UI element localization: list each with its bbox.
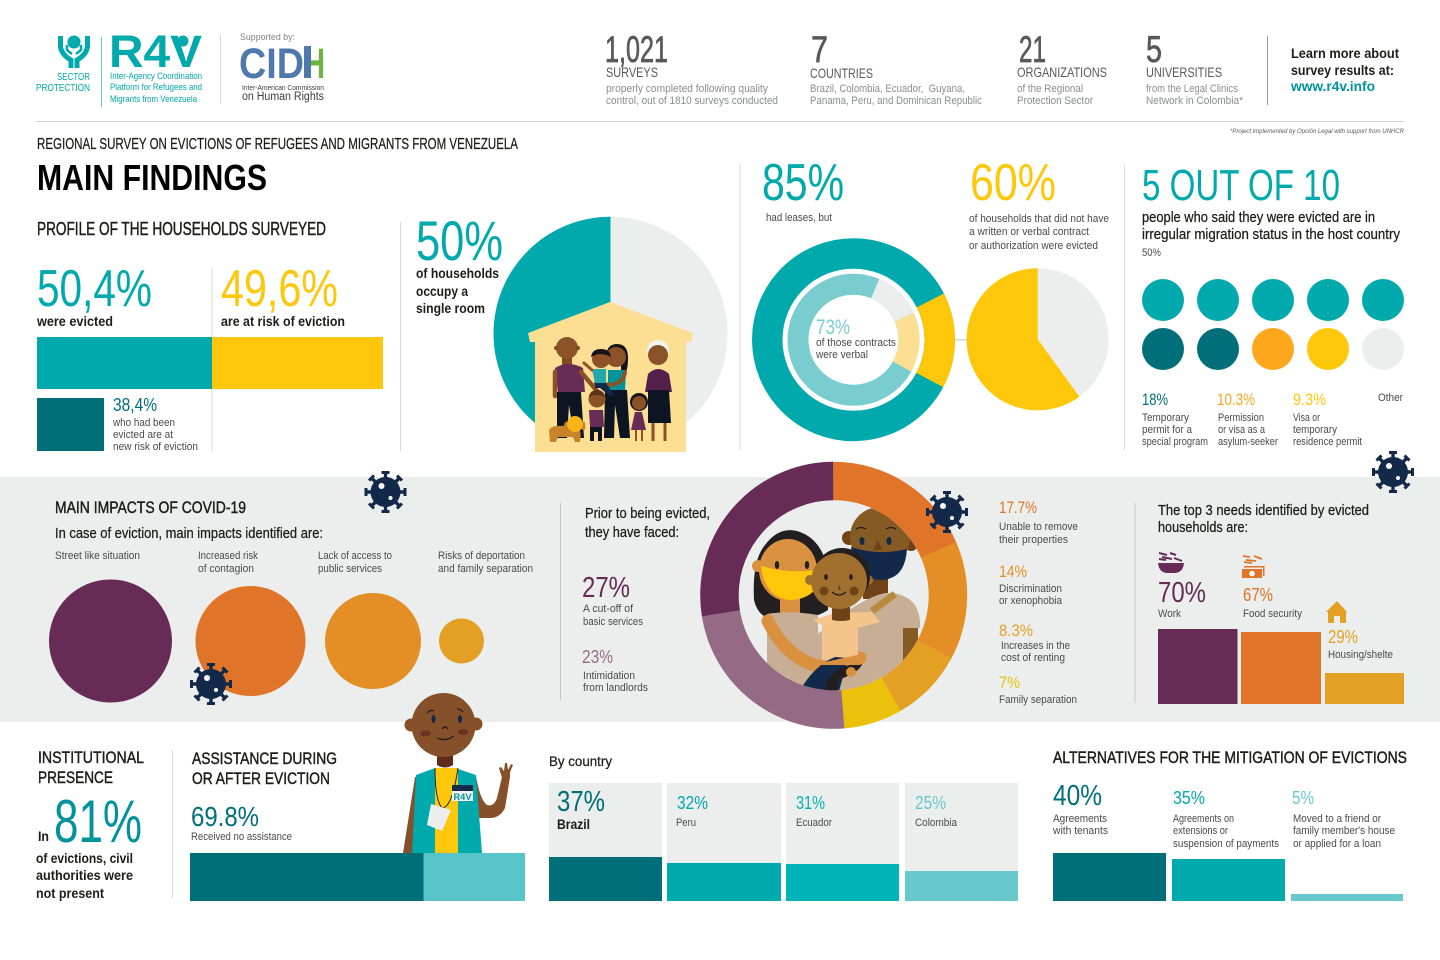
need: work: [1158, 577, 1206, 620]
stat: surveys: [605, 29, 778, 107]
dog: [549, 416, 586, 442]
R4V platform description: Inter-Agency Coordination: [110, 71, 202, 81]
status: visa: residence permit: [1293, 436, 1362, 448]
69.8 percent: [191, 801, 292, 843]
impact: contagion: Increased risk: [198, 550, 258, 562]
heading: households are:: [1158, 519, 1248, 536]
column: Colombia: [905, 783, 1018, 901]
60 percent text: of households that did not have: [969, 213, 1109, 225]
column: Ecuador: 31%: [796, 793, 825, 813]
impact: public services: Lack of access to: [318, 550, 392, 562]
heading: PROFILE OF THE HOUSEHOLDS SURVEYED: [37, 219, 326, 239]
73 percent text: were verbal: [815, 349, 868, 361]
stat: countries: COUNTRIES: [810, 65, 873, 81]
73 percent text: of those contracts: [816, 337, 896, 349]
status: permission: [1217, 390, 1278, 448]
pie chart 60 percent: [967, 268, 1109, 410]
dot matrix: [1142, 279, 1404, 370]
panel: donut legend: [999, 498, 1078, 706]
unable to remove: Unable to remove: [999, 521, 1078, 533]
column: Brazil: [549, 783, 662, 901]
new risk text: evicted are at: [113, 429, 173, 441]
column: Brazil: Brazil: [557, 816, 590, 832]
stat: universities: UNIVERSITIES: [1146, 64, 1222, 80]
icon: virus on donut: [928, 492, 966, 532]
heading: [38, 748, 144, 787]
alternative: extensions: 35%: [1173, 788, 1205, 808]
need: food security: 67%: [1243, 585, 1273, 605]
sector protection label: PROTECTION: [36, 82, 90, 94]
alternative: moved: or applied for a loan: [1293, 838, 1381, 850]
R4V logo: R4V: [109, 26, 202, 77]
alternative: extensions: Agreements on: [1173, 813, 1234, 825]
bar: at risk: [212, 337, 383, 389]
donut chart: [719, 481, 948, 710]
basic services: basic services: [583, 616, 643, 628]
alternative: agreements: Agreements: [1053, 813, 1107, 825]
85 percent text: had leases, but: [766, 212, 832, 224]
single room text: [416, 209, 503, 316]
heading: irregular migration status in the host country: [1142, 226, 1400, 243]
R4V platform description: Migrants from Venezuela: [110, 94, 197, 104]
learn more callout: survey results at:: [1291, 62, 1394, 78]
bar chart: [1158, 629, 1404, 704]
panel: covid impacts: [49, 498, 533, 702]
need: housing: Housing/shelte: [1328, 649, 1393, 661]
heading: 5 OUT OF 10: [1142, 161, 1340, 210]
heading: ASSISTANCE DURING: [192, 749, 337, 768]
CIDH logo: CID: [239, 40, 304, 88]
bar: evicted: [37, 337, 212, 389]
81 percent: In: [38, 828, 49, 844]
stat: countries: [810, 29, 982, 107]
panel: assistance: [190, 749, 525, 901]
need: food security: Food security: [1243, 608, 1302, 620]
69.8 percent: Received no assistance: [191, 831, 292, 843]
impact: deportation: and family separation: [438, 563, 533, 575]
column: Peru: Peru: [676, 817, 696, 829]
discrimination: [999, 562, 1063, 607]
status: permission: or visa as a: [1218, 424, 1266, 436]
stat: surveys: 1,021: [605, 29, 668, 70]
icon: protection sector hands: [60, 36, 88, 68]
man: [818, 508, 920, 690]
panel: top needs: [1158, 502, 1404, 704]
pie chart: [494, 217, 728, 451]
status: visa: [1293, 390, 1362, 448]
impact: contagion: [196, 550, 306, 696]
single room text: 50%: [416, 209, 503, 272]
alternative: moved: [1291, 788, 1403, 901]
heading: [585, 505, 710, 541]
new risk text: [112, 395, 198, 453]
stat: universities: Network in Colombia*: [1146, 95, 1244, 107]
supported by: Supported by:: [240, 32, 295, 43]
panel: leases: [762, 154, 1109, 426]
new risk text: new risk of eviction: [113, 441, 198, 453]
heading: In case of eviction, main impacts identified are:: [55, 525, 323, 542]
illustration: R4V worker: [403, 693, 513, 853]
stat: organizations: Protection Sector: [1017, 95, 1093, 107]
heading: By country: [549, 753, 612, 769]
name tag: [452, 785, 473, 802]
R4V platform description: Platform for Refugees and: [110, 82, 202, 92]
stat: universities: from the Legal Clinics: [1146, 83, 1238, 95]
status: visa: Visa or: [1293, 412, 1320, 424]
title: [37, 136, 518, 198]
73 percent text: 73%: [816, 316, 850, 339]
id card: [427, 804, 451, 831]
heading: 50%: [1142, 247, 1161, 259]
sector protection label: [36, 71, 90, 94]
alternative: extensions: suspension of payments: [1173, 838, 1279, 850]
panel: household profile: [36, 219, 383, 453]
icon: house: [1326, 601, 1347, 623]
family with masks illustration: [752, 507, 920, 700]
need: work: 70%: [1158, 577, 1206, 609]
learn more callout: www.r4v.info: [1290, 78, 1375, 94]
heading: people who said they were evicted are in: [1142, 209, 1375, 226]
column: Ecuador: Ecuador: [796, 817, 832, 829]
icon: money: [1242, 556, 1264, 578]
stat: countries: 7: [811, 29, 828, 70]
stat: surveys: properly completed following quality: [606, 83, 768, 95]
renting: Increases in the: [1001, 640, 1070, 652]
discrimination: 14%: [999, 562, 1027, 581]
need: food security: [1243, 585, 1302, 620]
stat: organizations: 21: [1019, 29, 1046, 70]
icon: virus top: [366, 472, 405, 512]
R4V platform description: [110, 71, 202, 104]
81 percent: 81%: [54, 788, 142, 855]
evicted figure: [36, 260, 152, 329]
heading: MAIN IMPACTS OF COVID-19: [55, 498, 246, 517]
column: Brazil: 37%: [557, 786, 605, 818]
heading: they have faced:: [585, 524, 679, 541]
covid band background: [0, 477, 1440, 722]
status: temporary permit: permit for a: [1142, 424, 1193, 436]
status: temporary permit: [1142, 390, 1208, 448]
icon: virus top right: [1374, 452, 1412, 492]
at risk figure: are at risk of eviction: [221, 313, 345, 329]
evicted figure: 50,4%: [37, 260, 152, 318]
renting: [999, 621, 1070, 664]
heading: [1158, 502, 1369, 536]
heading: OR AFTER EVICTION: [192, 769, 330, 788]
intimidation: Intimidation: [583, 670, 635, 682]
69.8 percent: 69.8%: [191, 801, 259, 832]
alternative: moved: family member's house: [1293, 825, 1395, 837]
logos header: [36, 26, 325, 107]
81 percent: not present: [36, 885, 104, 901]
alternative: moved: 5%: [1292, 788, 1314, 808]
family separation: Family separation: [999, 694, 1077, 706]
status: other: Other: [1378, 392, 1403, 404]
house: [528, 302, 693, 452]
status: permission: asylum-seeker: [1218, 436, 1278, 448]
alternative: extensions: extensions or: [1173, 825, 1228, 837]
family separation: 7%: [999, 673, 1020, 692]
title: REGIONAL SURVEY ON EVICTIONS OF REFUGEES AND MIGRANTS FROM VENEZUELA: [37, 136, 518, 153]
alternative: agreements: with tenants: [1052, 825, 1108, 837]
stat: surveys: control, out of 1810 surveys conducted: [606, 95, 778, 107]
intimidation: [582, 647, 648, 694]
panel: migration status: [1142, 161, 1404, 448]
CIDH logo: H: [304, 40, 325, 88]
heading: INSTITUTIONAL: [38, 748, 144, 767]
girl: [630, 393, 648, 441]
heading: PRESENCE: [38, 768, 113, 787]
icon: virus on circle: [192, 664, 230, 704]
unable to remove: 17.7%: [999, 498, 1037, 517]
impact: deportation: Risks of deportation: [438, 550, 525, 562]
woman: [752, 530, 860, 690]
learn more callout: [1290, 45, 1399, 94]
unable to remove: their properties: [999, 534, 1068, 546]
column: Colombia: 25%: [915, 793, 946, 813]
assistance bar: [190, 853, 525, 901]
alternative: agreements: 40%: [1053, 780, 1102, 812]
family illustration: [549, 337, 672, 442]
column: Peru: [667, 783, 781, 901]
CIDH logo: on Human Rights: [242, 91, 324, 103]
stat: universities: [1146, 29, 1244, 107]
title: MAIN FINDINGS: [37, 157, 267, 198]
impact: street: [49, 550, 172, 702]
panel: prior to eviction: [582, 481, 948, 710]
73 percent text: [815, 316, 896, 361]
intimidation: 23%: [582, 647, 613, 667]
inner donut: [798, 284, 909, 395]
CIDH logo: Inter-American Commission: [242, 85, 324, 92]
mother with toddler: [584, 344, 630, 438]
column: Colombia: Colombia: [915, 817, 958, 829]
sector protection label: SECTOR: [57, 71, 90, 83]
alternative: extensions: [1172, 788, 1285, 901]
new risk text: 38,4%: [113, 395, 157, 415]
at risk figure: 49,6%: [221, 260, 338, 318]
60 percent text: 60%: [970, 154, 1056, 212]
stat: surveys: SURVEYS: [606, 64, 658, 80]
footnote: *Project implemented by Opción Legal with support from UNHCR: [1230, 129, 1405, 135]
impact: public services: [318, 550, 421, 689]
status: visa: temporary: [1293, 424, 1337, 436]
status: permission: Permission: [1218, 412, 1264, 424]
60 percent text: a written or verbal contract: [969, 226, 1089, 238]
60 percent text: or authorization were evicted: [969, 240, 1098, 252]
column: Peru: 32%: [677, 793, 708, 813]
status: temporary permit: Temporary: [1142, 412, 1189, 424]
heading: The top 3 needs identified by evicted: [1158, 502, 1369, 519]
column: Ecuador: [786, 783, 899, 901]
heading: Prior to being evicted,: [585, 505, 710, 522]
panel: alternatives: [1052, 748, 1407, 901]
need: housing: 29%: [1328, 627, 1358, 647]
bar: new risk: [37, 398, 104, 451]
boy: [588, 390, 606, 441]
stat: organizations: of the Regional: [1017, 83, 1083, 95]
status: temporary permit: special program: [1142, 436, 1208, 448]
status: temporary permit: 18%: [1142, 390, 1168, 409]
grandmother: [645, 340, 672, 441]
learn more callout: Learn more about: [1291, 45, 1399, 61]
60 percent text: [969, 154, 1109, 252]
alternative: moved: Moved to a friend or: [1293, 813, 1381, 825]
impact: public services: public services: [318, 563, 382, 575]
heading: [55, 498, 323, 542]
panel: institutional presence: [36, 748, 144, 901]
single room text: single room: [416, 300, 485, 316]
81 percent: [36, 788, 142, 901]
renting: 8.3%: [999, 621, 1033, 640]
single room text: of households: [416, 265, 499, 281]
stat: countries: Panama, Peru, and Dominican Republic: [810, 95, 982, 107]
need: housing: [1328, 627, 1393, 661]
basic services: [582, 572, 643, 628]
stat: countries: Brazil, Colombia, Ecuador, Guyana,: [810, 83, 965, 95]
father: [554, 337, 597, 438]
stat: universities: 5: [1146, 29, 1162, 70]
intimidation: from landlords: [583, 682, 648, 694]
single room text: occupy a: [416, 283, 468, 299]
81 percent: of evictions, civil: [36, 850, 133, 866]
81 percent: authorities were: [36, 867, 133, 883]
name tag: R4V: [454, 792, 472, 802]
status: visa: 9.3%: [1293, 390, 1326, 409]
status: permission: 10.3%: [1217, 390, 1255, 409]
icon: bowl: [1158, 553, 1184, 573]
discrimination: or xenophobia: [999, 595, 1063, 607]
basic services: 27%: [582, 572, 630, 604]
outer donut: [767, 253, 940, 426]
CIDH logo: [239, 40, 325, 103]
impact: street: Street like situation: [55, 550, 140, 562]
child: [800, 548, 880, 700]
basic services: A cut-off of: [583, 603, 634, 615]
alternative: agreements: [1052, 780, 1166, 901]
renting: cost of renting: [1001, 652, 1065, 664]
new risk text: who had been: [112, 417, 175, 429]
family separation: [999, 673, 1077, 706]
evicted figure: were evicted: [36, 313, 113, 329]
panel: by country: [549, 753, 1018, 901]
stat: organizations: ORGANIZATIONS: [1017, 64, 1107, 80]
discrimination: Discrimination: [999, 583, 1062, 595]
85 percent text: 85%: [762, 154, 844, 212]
impact: contagion: of contagion: [198, 563, 254, 575]
stat: organizations: [1017, 29, 1107, 107]
unable to remove: [999, 498, 1078, 546]
need: work: Work: [1158, 608, 1181, 620]
heading: [192, 749, 337, 788]
panel: single room: [416, 209, 728, 452]
85 percent text: [762, 154, 844, 224]
heading: [1142, 161, 1400, 259]
impact: deportation: [438, 550, 533, 664]
